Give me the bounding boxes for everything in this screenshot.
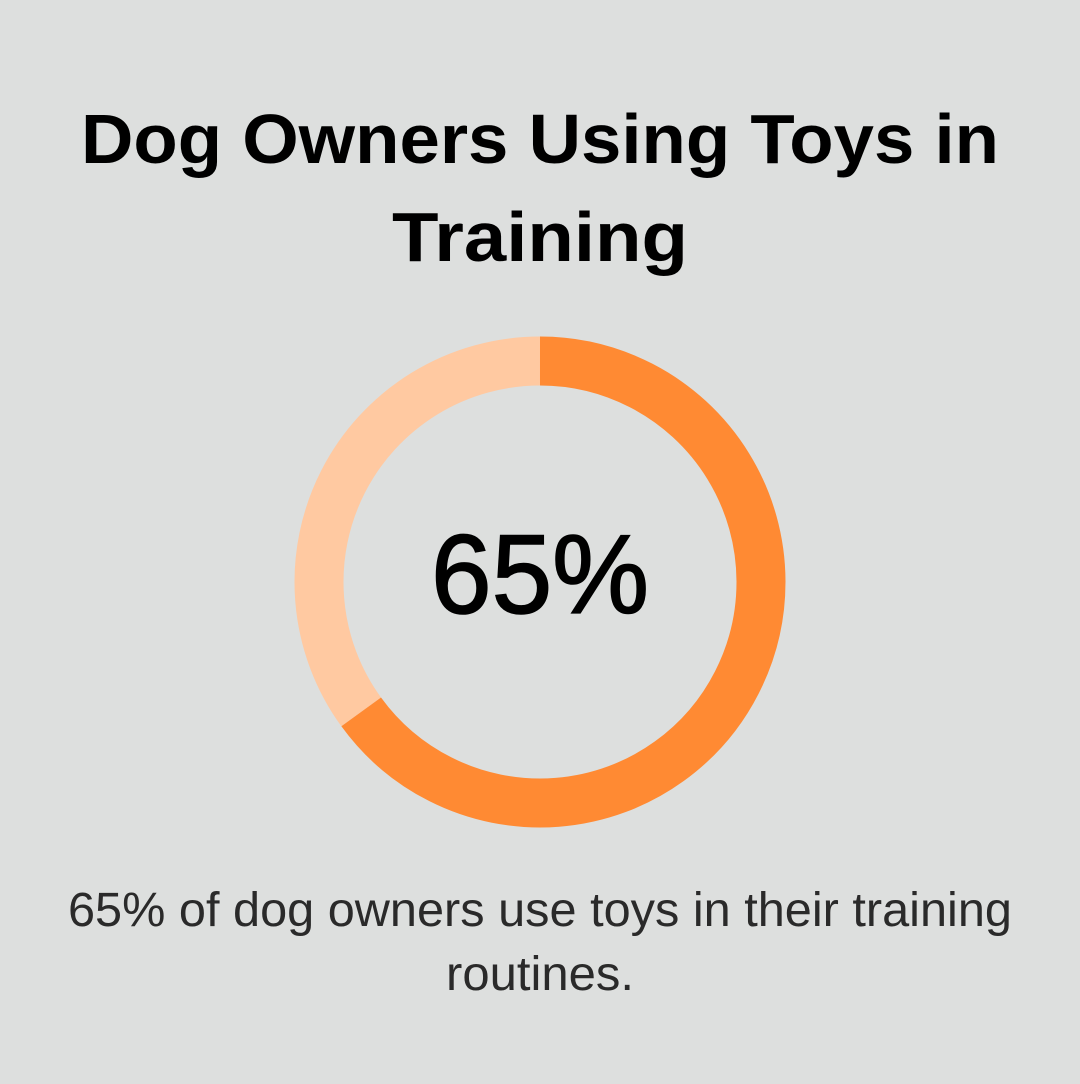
title bbox=[81, 100, 999, 276]
donut segment: 65 percent bbox=[361, 361, 761, 803]
center value: 65% bbox=[431, 512, 649, 637]
donut chart: 65 percent bbox=[319, 361, 761, 803]
title line 2: Training bbox=[392, 198, 688, 276]
donut segment: remaining 35 percent bbox=[319, 361, 540, 712]
description line 2: routines. bbox=[446, 948, 634, 1001]
description line 1: 65% of dog owners use toys in their training bbox=[68, 884, 1012, 937]
description text bbox=[68, 884, 1012, 1001]
title line 1: Dog Owners Using Toys in bbox=[81, 100, 999, 178]
